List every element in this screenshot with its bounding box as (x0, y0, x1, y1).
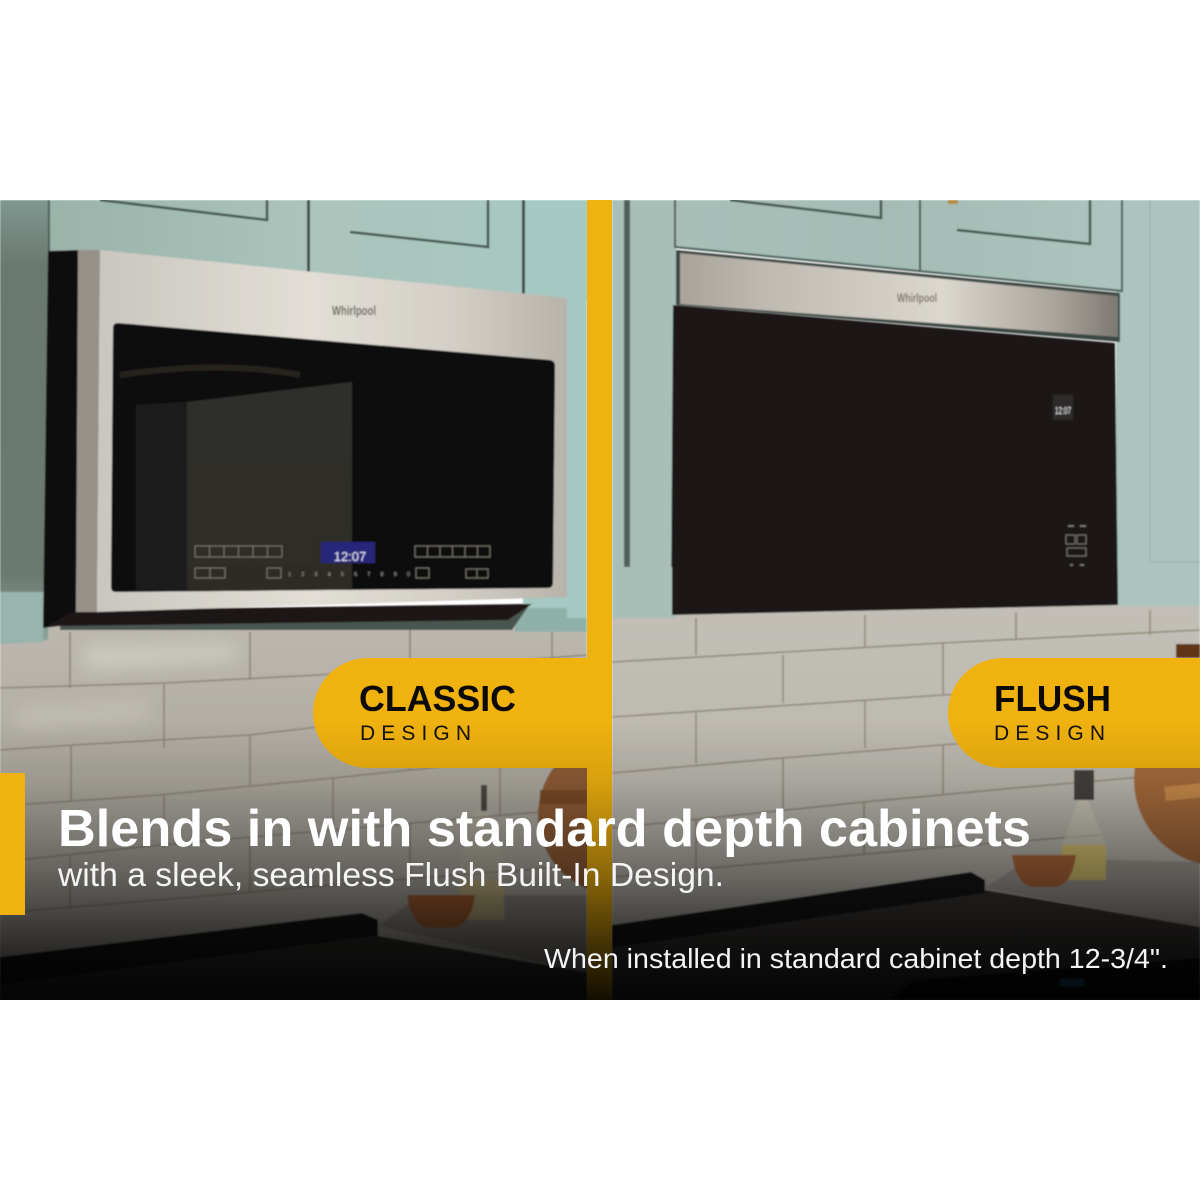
label: flush design: FLUSH (994, 678, 1111, 719)
wall column left of microwave (612, 200, 676, 618)
number keypad: 1 2 3 4 5 6 7 8 9 0 (288, 572, 410, 578)
clock display: 12:07 (1055, 406, 1071, 417)
cutting board, right (1134, 644, 1200, 866)
oil carafe, right (1062, 770, 1106, 880)
microwave grey side strip (76, 250, 100, 612)
lower cabinet, left (0, 592, 45, 644)
wall column right of microwave (1116, 200, 1200, 606)
stove rail, right (612, 872, 985, 948)
subheading: with a sleek, seamless Flush Built-In Design. (57, 856, 724, 893)
stove glass top, left (0, 936, 587, 1000)
bottom darkening overlay (0, 720, 1200, 1000)
microwave: classic design (43, 250, 567, 628)
label: classic design (359, 678, 516, 745)
upper cabinet doors, right (675, 200, 1122, 291)
scene, right (612, 200, 1200, 1000)
stove knob display (1060, 979, 1084, 986)
cabinet bottom strip, left of microwave (612, 567, 672, 618)
countertop, right (985, 858, 1200, 927)
label: classic design: DESIGN (360, 722, 471, 745)
touch controls (1066, 526, 1086, 565)
microwave: flush design (671, 250, 1120, 615)
label: flush design (994, 678, 1111, 745)
panel: classic design kitchen scene (0, 200, 587, 1000)
microwave black side (43, 250, 80, 628)
stove rail, left (0, 913, 378, 985)
panel: flush design kitchen scene (612, 200, 1200, 1000)
label: flush design: DESIGN (994, 722, 1105, 745)
microwave black panel (671, 305, 1118, 615)
label: classic design: CLASSIC (359, 678, 516, 719)
wooden bowl, right (1012, 855, 1076, 887)
wall and cabinet column, left (0, 200, 48, 640)
stove front, right (1026, 959, 1200, 973)
countertop, left (380, 895, 587, 940)
yellow accent block (0, 773, 25, 915)
clock display (1053, 395, 1073, 420)
wooden bowl, left (407, 895, 475, 928)
headline: Blends in with standard depth cabinets (58, 800, 1031, 858)
microwave stainless band (680, 253, 1118, 337)
upper cabinet doors, left (48, 200, 588, 632)
backsplash tiles, right (612, 604, 1200, 924)
scene, left (0, 200, 587, 1000)
pill: flush design background (948, 658, 1200, 768)
pill: classic design background (313, 658, 587, 768)
Whirlpool logo: Whirlpool (897, 291, 937, 305)
microwave glass door (111, 323, 555, 592)
microwave underside (43, 604, 532, 628)
cabinet side trim (566, 608, 587, 618)
microwave stainless front (97, 250, 567, 612)
backsplash tiles, left (0, 624, 587, 968)
oil bottle, left (460, 785, 504, 920)
footnote: When installed in standard cabinet depth 12-3/4". (544, 943, 1168, 974)
control panel buttons (195, 546, 490, 578)
Whirlpool logo: Whirlpool (332, 303, 376, 318)
infographic canvas (0, 200, 1200, 1000)
vertical yellow divider (587, 200, 612, 1000)
hood shadow under microwave (60, 604, 530, 630)
column groove (624, 200, 630, 567)
window reflection (120, 368, 352, 590)
trim gap (676, 250, 1120, 342)
blue clock display (321, 542, 375, 564)
blue clock display: 12:07 (334, 549, 366, 564)
stove glass top, right (612, 890, 1200, 1000)
cutting board, left (538, 768, 587, 890)
